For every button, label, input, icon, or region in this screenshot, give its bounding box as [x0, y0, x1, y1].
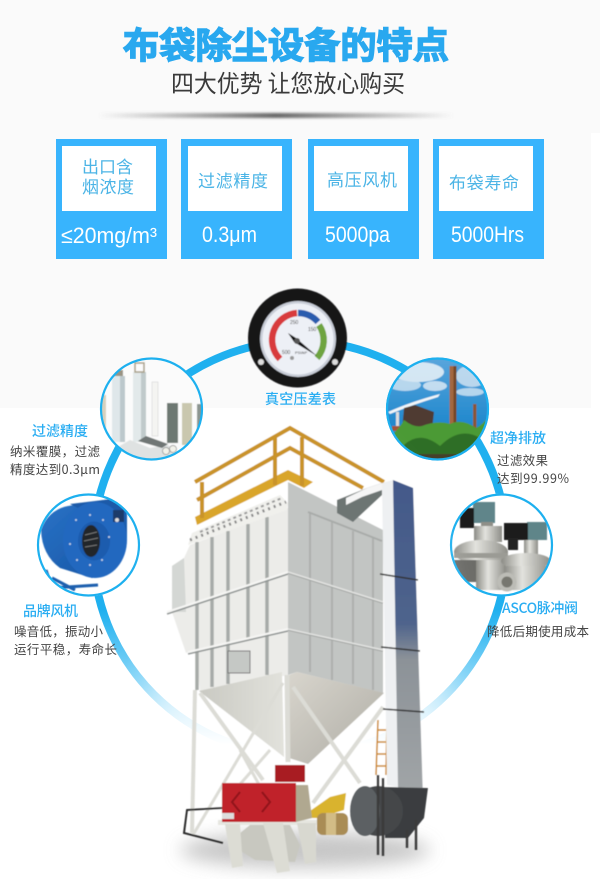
panel: outlet dust concentration: 烟浓度 — [82, 173, 134, 198]
text block: ultra clean emissions: 过滤效果 — [497, 450, 548, 469]
text block: filtration precision — [10, 421, 100, 478]
panel: bag lifetime: 布袋寿命 — [449, 169, 519, 194]
text block: ASCO pulse valve — [487, 598, 589, 640]
machine: red control boxes — [222, 765, 305, 822]
machine: support frame — [192, 675, 383, 835]
subtitle: 四大优势 让您放心购买 — [171, 64, 405, 99]
machine: hoppers — [199, 672, 384, 764]
title: 布袋除尘设备的特点 — [123, 17, 449, 69]
panel: outlet dust concentration: ≤20mg/m³ — [61, 223, 157, 248]
machine: gearbox and base — [184, 785, 317, 873]
panel: high pressure fan — [308, 139, 419, 259]
text block: ultra clean emissions — [490, 428, 569, 487]
text block: ultra clean emissions: 超净排放 — [490, 428, 546, 448]
text block: ASCO pulse valve: 降低后期使用成本 — [487, 621, 589, 640]
text block: ASCO pulse valve: ASCO脉冲阀 — [502, 598, 578, 618]
label: gauge: 真空压差表 — [265, 389, 336, 409]
text block: filtration precision: 纳米覆膜，过滤 — [10, 441, 100, 460]
text block: brand fan: 运行平稳，寿命长 — [14, 639, 117, 658]
panel: high pressure fan: 高压风机 — [327, 166, 397, 191]
panel: filtration precision: 0.3μm — [202, 222, 257, 247]
text block: brand fan — [14, 601, 117, 658]
machine: dark exhaust fan — [350, 775, 428, 856]
icon: vacuum differential pressure gauge: PSI/kP — [295, 350, 308, 355]
dust collector machine illustration — [150, 425, 450, 873]
icon: clean emissions chimney photo — [386, 357, 490, 462]
panel: high pressure fan: 5000pa — [325, 222, 391, 247]
panel: bag lifetime — [433, 139, 544, 259]
panel: filtration precision — [181, 139, 292, 259]
connecting blue ring — [93, 341, 507, 755]
header separator shadow — [98, 113, 454, 118]
icon: ASCO pulse valve photo — [450, 494, 553, 596]
icon: filter bags photo — [100, 357, 204, 462]
machine: yellow deck and railing — [195, 428, 384, 525]
machine: left body face — [167, 508, 288, 692]
text block: brand fan: 品牌风机 — [23, 601, 78, 621]
panel: bag lifetime: 5000Hrs — [451, 222, 524, 247]
panel: outlet dust concentration: 出口含 — [82, 153, 133, 178]
text block: filtration precision: 精度达到0.3μm — [10, 459, 100, 478]
icon: blue centrifugal fan photo — [37, 494, 140, 596]
machine: pulse header — [188, 495, 288, 545]
machine: right body face — [288, 482, 383, 693]
icon: vacuum differential pressure gauge — [248, 288, 347, 388]
icon: vacuum differential pressure gauge: 150 — [308, 327, 317, 333]
machine: ladder — [376, 720, 387, 775]
icon: vacuum differential pressure gauge: 500 — [282, 350, 291, 356]
machine: exhaust duct — [337, 480, 424, 800]
panel: filtration precision: 过滤精度 — [198, 167, 268, 192]
icon: vacuum differential pressure gauge: 250 — [290, 320, 299, 326]
text block: filtration precision: 过滤精度 — [32, 421, 88, 441]
panel: outlet dust concentration — [56, 139, 167, 259]
machine: yellow guard and gold motor — [300, 793, 348, 835]
text block: brand fan: 噪音低，振动小 — [14, 621, 103, 640]
text block: ultra clean emissions: 达到99.99% — [497, 468, 569, 487]
